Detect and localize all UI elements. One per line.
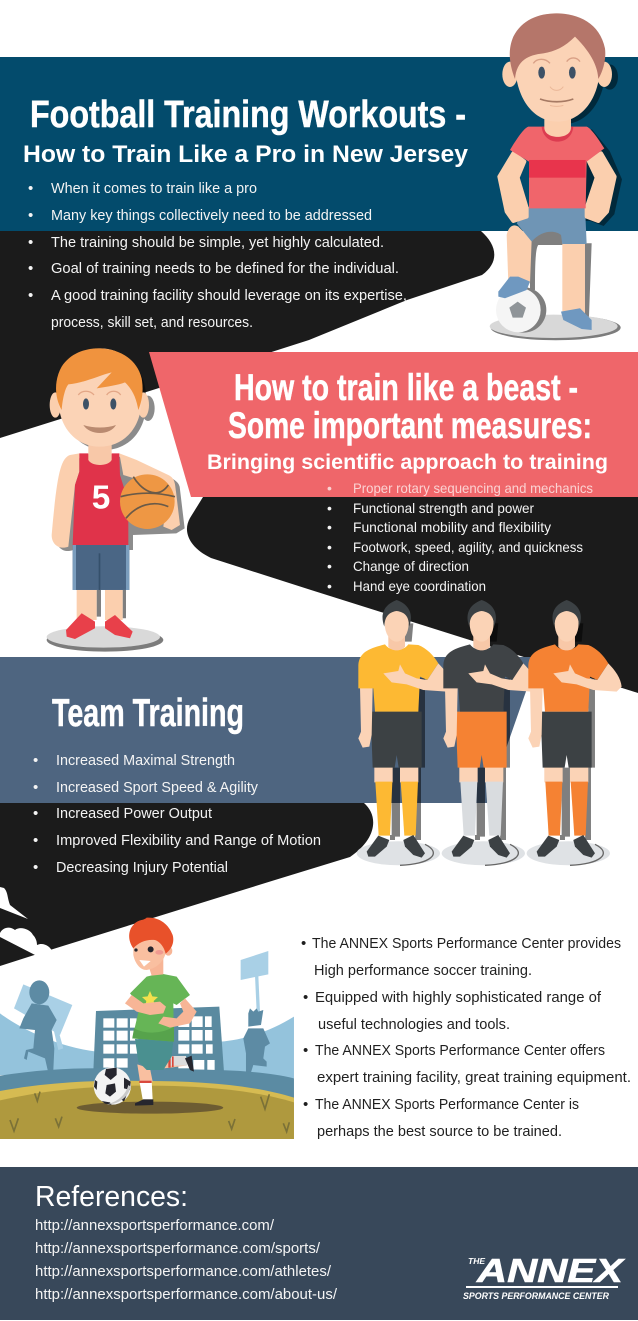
player: orange shirt — [527, 600, 622, 865]
heading: references: References: — [35, 1181, 188, 1213]
team training bullet list: Improved Flexibility and Range of Motion — [56, 832, 321, 849]
team training bullet list: • — [33, 805, 38, 822]
measures bullet list: Functional strength and power — [353, 500, 534, 516]
illustration: clouds on black swoosh — [0, 887, 52, 956]
illustration: boy with basketball — [47, 348, 185, 652]
intro bullet list — [28, 180, 407, 331]
illustration: boy playing soccer — [0, 918, 294, 1139]
measures bullet list: • — [327, 500, 332, 516]
logo: the annex sports performance center: THE — [468, 1257, 486, 1266]
panel: red heading banner — [149, 352, 638, 497]
text block: annex description: useful technologies and tools. — [318, 1016, 510, 1033]
intro bullet list: Goal of training needs to be defined for the individual. — [51, 260, 399, 277]
measures bullet list: • — [327, 480, 332, 496]
team training bullet list: Increased Maximal Strength — [56, 752, 235, 769]
icon: soccer ball — [94, 1067, 131, 1105]
panel: black swoosh behind intro — [0, 231, 494, 438]
logo: the annex sports performance center: SPORTS PERFORMANCE CENTER — [463, 1291, 609, 1302]
intro bullet list: • — [28, 180, 33, 197]
text block: annex description: perhaps the best source to be trained. — [317, 1123, 562, 1140]
intro bullet list: • — [28, 260, 33, 277]
intro bullet list: process, skill set, and resources. — [51, 314, 253, 331]
title block — [23, 94, 469, 168]
measures bullet list — [327, 480, 593, 594]
illustration: boy with basketball: 5 — [92, 479, 110, 516]
heading: how to train like a beast — [207, 367, 608, 474]
intro bullet list: A good training facility should leverage on its expertise, — [51, 287, 407, 304]
character: boy kicking — [125, 918, 197, 1106]
measures bullet list: • — [327, 578, 332, 594]
intro bullet list: The training should be simple, yet highly calculated. — [51, 234, 384, 251]
team training bullet list: Increased Sport Speed & Agility — [56, 779, 258, 796]
intro bullet list: • — [28, 287, 33, 304]
scene: ground shadow — [77, 1102, 223, 1114]
references link list: http://annexsportsperformance.com/sports/ — [35, 1240, 321, 1257]
references link list — [35, 1217, 338, 1303]
title block: How to Train Like a Pro in New Jersey — [23, 141, 469, 168]
player: dark shirt with orange shorts — [442, 600, 537, 865]
text block: annex description: High performance soccer training. — [314, 962, 532, 979]
team training bullet list: • — [33, 752, 38, 769]
panel: slate team training band — [0, 657, 538, 803]
text block: annex description: • — [303, 1096, 308, 1113]
scene: stadium background — [0, 951, 294, 1139]
references link list: http://annexsportsperformance.com/ — [35, 1217, 275, 1234]
text block: annex description: The ANNEX Sports Performance Center provides — [312, 935, 621, 952]
team training bullet list: • — [33, 859, 38, 876]
intro bullet list: • — [28, 207, 33, 224]
measures bullet list: Change of direction — [353, 558, 469, 574]
heading: team training: Team Training — [52, 692, 244, 735]
panel: teal header band — [0, 57, 638, 231]
team training bullet list: Decreasing Injury Potential — [56, 859, 228, 876]
title block: Football Training Workouts - — [30, 94, 466, 136]
panel: references footer — [0, 1167, 638, 1320]
measures bullet list: Proper rotary sequencing and mechanics — [353, 480, 593, 496]
panel: black swoosh behind measures — [187, 497, 638, 693]
panel: black swoosh behind team list — [0, 803, 373, 966]
references link list: http://annexsportsperformance.com/athletes/ — [35, 1263, 332, 1280]
text block: annex description — [301, 935, 631, 1140]
intro bullet list: • — [28, 234, 33, 251]
intro bullet list: When it comes to train like a pro — [51, 180, 257, 197]
text block: annex description: The ANNEX Sports Performance Center offers — [315, 1042, 605, 1059]
intro bullet list: Many key things collectively need to be addressed — [51, 207, 372, 224]
team training bullet list: Increased Power Output — [56, 805, 213, 822]
text block: annex description: • — [303, 989, 308, 1006]
text block: annex description: expert training facility, great training equipment. — [317, 1069, 631, 1086]
team training bullet list: • — [33, 779, 38, 796]
measures bullet list: • — [327, 539, 332, 555]
measures bullet list: Footwork, speed, agility, and quickness — [353, 539, 583, 555]
measures bullet list: Hand eye coordination — [353, 578, 486, 594]
references link list: http://annexsportsperformance.com/about-us/ — [35, 1286, 338, 1303]
measures bullet list: • — [327, 558, 332, 574]
team training bullet list — [33, 752, 321, 876]
text block: annex description: • — [301, 935, 306, 952]
illustration: boy with soccer ball — [490, 13, 622, 340]
measures bullet list: Functional mobility and flexibility — [353, 519, 551, 535]
text block: annex description: The ANNEX Sports Performance Center is — [315, 1096, 579, 1113]
text block: annex description: Equipped with highly sophisticated range of — [315, 989, 602, 1006]
measures bullet list: • — [327, 519, 332, 535]
player: yellow shirt — [357, 600, 452, 865]
logo: the annex sports performance center: ANNEX — [476, 1252, 625, 1289]
team training bullet list: • — [33, 832, 38, 849]
heading: how to train like a beast: Bringing scientific approach to training — [207, 451, 608, 474]
illustration: three team players — [357, 600, 622, 865]
logo: the annex sports performance center — [463, 1252, 625, 1302]
text block: annex description: • — [303, 1042, 308, 1059]
